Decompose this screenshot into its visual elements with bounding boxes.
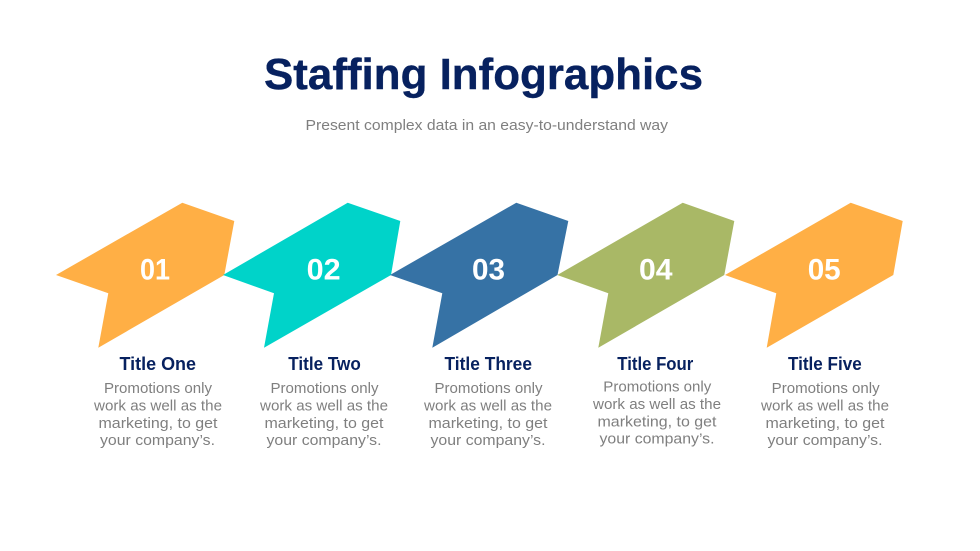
arrow shape 4 bbox=[557, 203, 734, 348]
description 1: Promotions only bbox=[104, 380, 212, 397]
description 3: your company’s. bbox=[430, 432, 546, 449]
heading: Title Five: Title Five bbox=[788, 354, 862, 374]
description 5: Promotions only bbox=[772, 380, 880, 397]
description 1: work as well as the bbox=[93, 398, 222, 414]
description 4 bbox=[592, 378, 721, 448]
number 05: 05 bbox=[808, 254, 841, 286]
description 3: Promotions only bbox=[434, 380, 543, 397]
description 5 bbox=[760, 380, 889, 449]
description 3 bbox=[423, 380, 552, 449]
number 03: 03 bbox=[472, 254, 505, 286]
description 3: work as well as the bbox=[423, 398, 552, 414]
heading: Title Two: Title Two bbox=[288, 354, 361, 374]
description 2: marketing, to get bbox=[264, 415, 384, 432]
subtitle: Present complex data in an easy-to-understand way bbox=[306, 118, 669, 134]
heading: Title Three: Title Three bbox=[444, 354, 532, 374]
description 4: marketing, to get bbox=[598, 414, 717, 430]
description 5: your company’s. bbox=[768, 432, 882, 449]
number 04: 04 bbox=[639, 254, 673, 286]
description 1 bbox=[93, 380, 222, 449]
arrow shape 1 bbox=[56, 203, 234, 348]
number 01: 01 bbox=[140, 254, 170, 286]
title: Staffing Infographics bbox=[264, 50, 703, 99]
description 5: work as well as the bbox=[760, 398, 889, 414]
description 5: marketing, to get bbox=[766, 415, 885, 432]
description 3: marketing, to get bbox=[428, 415, 548, 432]
step 1 bbox=[56, 203, 234, 449]
number 02: 02 bbox=[307, 254, 341, 286]
description 4: work as well as the bbox=[592, 396, 721, 413]
arrow shape 5 bbox=[725, 203, 903, 348]
heading: Title Four: Title Four bbox=[617, 354, 693, 374]
step 3 bbox=[390, 203, 568, 449]
step 5 bbox=[725, 203, 903, 449]
description 2: Promotions only bbox=[270, 380, 379, 397]
description 1: marketing, to get bbox=[98, 415, 218, 432]
step 4 bbox=[557, 203, 734, 448]
arrow shape 2 bbox=[223, 203, 400, 348]
description 4: Promotions only bbox=[603, 378, 712, 396]
step 2 bbox=[223, 203, 400, 449]
heading: Title One: Title One bbox=[120, 354, 196, 374]
description 2 bbox=[259, 380, 388, 449]
arrow shape 3 bbox=[390, 203, 568, 348]
description 1: your company’s. bbox=[100, 432, 215, 449]
description 2: work as well as the bbox=[259, 398, 388, 414]
description 4: your company’s. bbox=[600, 430, 714, 448]
description 2: your company’s. bbox=[266, 432, 382, 449]
